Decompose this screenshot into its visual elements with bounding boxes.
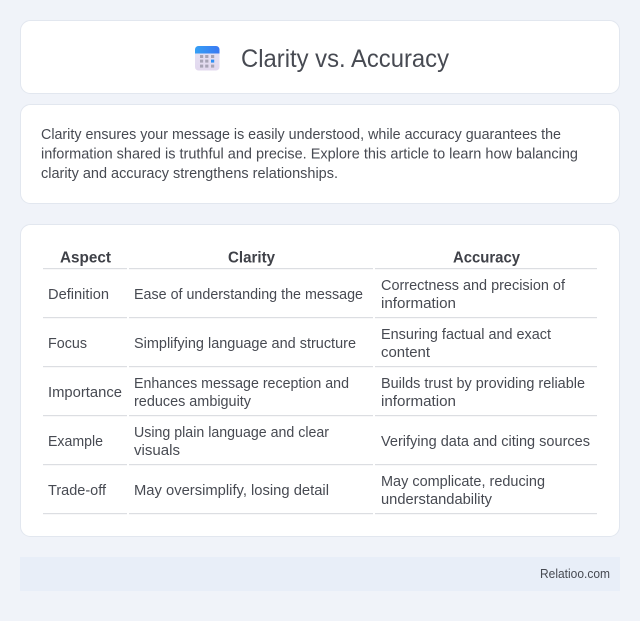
row: importance: Importance — [48, 385, 122, 401]
row: focus: Simplifying language and structure — [134, 336, 356, 352]
row: example — [48, 425, 590, 459]
row: trade-off — [48, 474, 545, 508]
row: definition: Definition — [48, 287, 109, 303]
row: importance: Enhances message reception and — [134, 376, 349, 392]
row: definition — [48, 278, 566, 312]
intro text: clarity and accuracy strengthens relationships. — [41, 166, 338, 182]
row: example: Verifying data and citing sources — [381, 434, 590, 450]
row: importance: reduces ambiguity — [134, 394, 252, 410]
intro text: Clarity ensures your message is easily understood, while accuracy guarantees the — [41, 127, 561, 143]
intro text — [41, 127, 578, 182]
row: definition: Ease of understanding the message — [134, 287, 363, 303]
row: trade-off: Trade-off — [48, 483, 107, 499]
row: focus: content — [381, 345, 430, 361]
icon: calendar — [195, 46, 220, 70]
table header: Clarity — [228, 250, 275, 266]
panel: comparison table — [20, 224, 620, 536]
row: example: Example — [48, 434, 103, 450]
row: definition: information — [381, 296, 456, 312]
row: trade-off: May oversimplify, losing detail — [134, 483, 329, 499]
intro text: information shared is truthful and precise. Explore this article to learn how balancing — [41, 146, 578, 162]
row: focus: Focus — [48, 336, 87, 352]
panel: introduction — [20, 104, 620, 204]
row: trade-off: understandability — [381, 492, 493, 508]
table header: Accuracy — [453, 250, 520, 266]
title: Clarity vs. Accuracy — [241, 45, 449, 73]
footer bar — [20, 557, 620, 591]
row: example: visuals — [134, 443, 180, 459]
footer credit: Relatioo.com — [540, 567, 610, 581]
table header — [60, 250, 520, 266]
row: example: Using plain language and clear — [134, 425, 329, 441]
row: importance: Builds trust by providing reliable — [381, 376, 585, 392]
row: focus — [48, 327, 551, 361]
row: trade-off: May complicate, reducing — [381, 474, 545, 490]
row: importance — [48, 376, 585, 410]
row: definition: Correctness and precision of — [381, 278, 566, 294]
table header: Aspect — [60, 250, 111, 266]
row: importance: information — [381, 394, 456, 410]
panel: title header — [20, 20, 620, 94]
row: focus: Ensuring factual and exact — [381, 327, 551, 343]
